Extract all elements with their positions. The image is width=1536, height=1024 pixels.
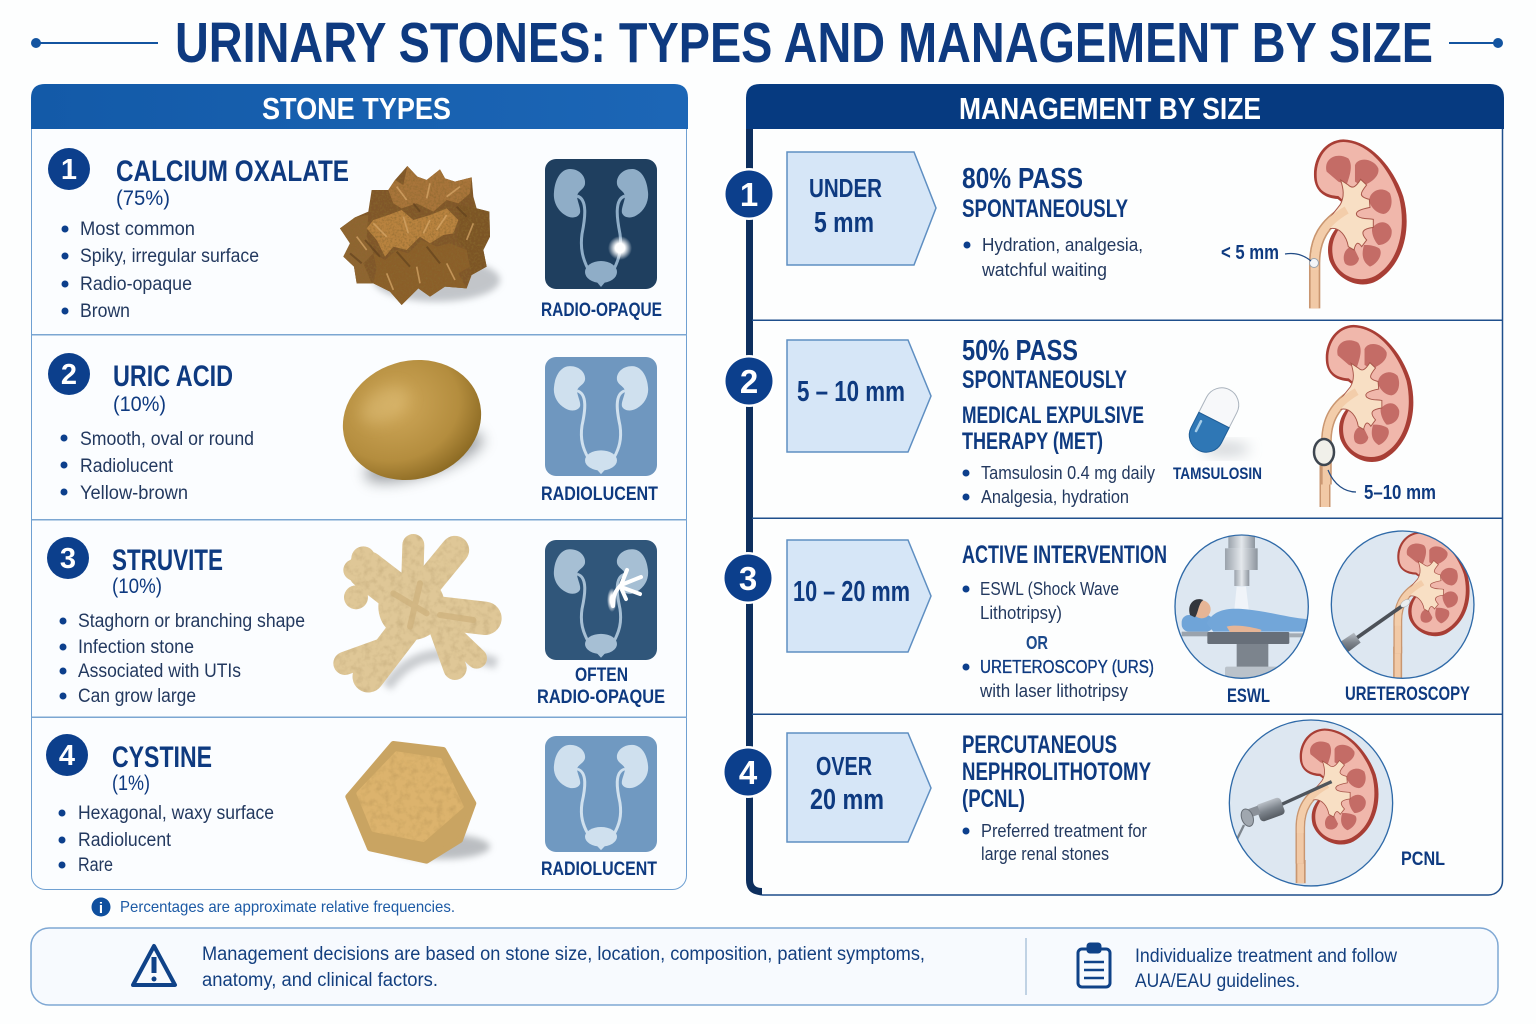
intervention list: ESWL (Shock Wave — [980, 579, 1119, 599]
calcium oxalate list: Brown — [80, 301, 130, 322]
calcium oxalate list: Spiky, irregular surface — [80, 246, 259, 267]
kidney: under 5 mm — [1221, 139, 1407, 308]
illustration: PCNL — [1229, 720, 1445, 886]
x-ray: radiolucent: RADIOLUCENT — [541, 484, 658, 505]
x-ray: radiolucent — [541, 357, 658, 505]
MET list: Tamsulosin 0.4 mg daily — [981, 463, 1155, 483]
guideline note: AUA/EAU guidelines. — [1135, 971, 1300, 992]
kidney: 5-10 mm — [1314, 325, 1436, 507]
row: 5-10 mm — [723, 325, 1436, 507]
size arrow: 5-10 mm — [787, 340, 931, 452]
management note: anatomy, and clinical factors. — [202, 970, 438, 991]
size arrow: 10-20 mm — [787, 540, 931, 652]
heading: 50% pass — [962, 335, 1127, 394]
calcium oxalate list — [62, 219, 259, 322]
struvite list — [60, 611, 305, 707]
icon: warning triangle — [133, 946, 175, 985]
size arrow: under 5 mm — [787, 152, 936, 265]
management header: MANAGEMENT BY SIZE — [959, 91, 1261, 126]
heading: MET: MEDICAL EXPULSIVE — [962, 402, 1144, 429]
calcium oxalate list: Radio-opaque — [80, 274, 192, 295]
badge 1 — [48, 148, 90, 190]
heading: 80% pass: 80% PASS — [962, 163, 1083, 195]
badge 4 — [722, 746, 774, 798]
calcium oxalate list: Most common — [80, 219, 195, 240]
cystine list: Rare — [78, 855, 113, 876]
heading: PCNL: (PCNL) — [962, 785, 1025, 813]
kidney: under 5 mm: < 5 mm — [1221, 242, 1279, 264]
icon: tamsulosin capsule — [1173, 382, 1262, 483]
size arrow: under 5 mm: 5 mm — [814, 207, 874, 239]
uric acid list: Radiolucent — [80, 456, 174, 477]
management note — [202, 944, 925, 991]
uric acid heading: URIC ACID — [113, 360, 233, 393]
size arrow: 10-20 mm: 10 – 20 mm — [793, 576, 910, 608]
heading: PCNL — [962, 731, 1151, 813]
illustration: PCNL: PCNL — [1401, 849, 1445, 870]
row: struvite — [47, 537, 665, 708]
intervention list: Lithotripsy) — [980, 603, 1062, 623]
size arrow: over 20 mm: 20 mm — [810, 784, 884, 816]
struvite list: Can grow large — [78, 686, 196, 707]
row: under 5 mm — [723, 139, 1407, 308]
badge 2: 2 — [61, 359, 77, 391]
badge 3: 3 — [60, 543, 76, 575]
illustration: ESWL: ESWL — [1227, 686, 1270, 707]
row: calcium oxalate — [48, 148, 662, 322]
management header — [746, 84, 1504, 129]
illustration: ureteroscopy: URETEROSCOPY — [1345, 684, 1470, 705]
cystine list: Radiolucent — [78, 830, 172, 851]
panel: stone types — [31, 84, 688, 890]
intervention list — [962, 579, 1154, 701]
illustration: ESWL — [1175, 533, 1313, 707]
stone: calcium oxalate — [340, 166, 500, 305]
size arrow: under 5 mm: UNDER — [809, 173, 882, 203]
struvite heading: (10%) — [112, 575, 162, 598]
x-ray: often radio-opaque — [537, 540, 665, 708]
PCNL list: large renal stones — [981, 844, 1109, 864]
advice list: Hydration, analgesia, — [982, 234, 1143, 255]
heading: MET — [962, 402, 1144, 455]
x-ray: radio-opaque — [541, 159, 662, 321]
uric acid list: Yellow-brown — [80, 483, 188, 504]
size arrow: over 20 mm: OVER — [816, 751, 872, 781]
struvite heading: STRUVITE — [112, 544, 223, 577]
row: over 20 mm — [722, 720, 1445, 886]
cystine list — [58, 803, 274, 876]
illustration: ureteroscopy — [1331, 531, 1474, 705]
heading: 80% pass: SPONTANEOUSLY — [962, 195, 1128, 223]
intervention list: URETEROSCOPY (URS) — [980, 657, 1154, 677]
icon: clipboard — [1078, 944, 1110, 987]
row: cystine — [46, 734, 657, 880]
stone: struvite — [343, 545, 497, 687]
kidney: 5-10 mm: 5–10 mm — [1364, 482, 1436, 504]
heading: PCNL: PERCUTANEOUS — [962, 731, 1117, 759]
badge 4: 4 — [739, 754, 758, 791]
footnote: Percentages are approximate relative frequencies. — [120, 899, 455, 916]
struvite list: Associated with UTIs — [78, 661, 241, 682]
badge 2: 2 — [740, 363, 758, 400]
footnote: i — [99, 900, 103, 917]
panel: management by size — [722, 84, 1504, 895]
size arrow: over 20 mm — [787, 733, 931, 842]
calcium oxalate heading — [116, 155, 349, 210]
cystine heading: CYSTINE — [112, 741, 212, 774]
intervention list: with laser lithotripsy — [979, 681, 1128, 701]
uric acid heading: (10%) — [113, 393, 166, 416]
calcium oxalate heading: CALCIUM OXALATE — [116, 155, 349, 188]
stone: cystine — [348, 744, 490, 861]
badge 3 — [722, 552, 774, 604]
guideline note — [1135, 946, 1397, 992]
heading: 80% pass — [962, 163, 1128, 223]
badge 1: 1 — [740, 176, 758, 213]
uric acid list — [60, 429, 254, 504]
badge 3 — [47, 537, 89, 579]
row: uric acid — [48, 343, 658, 505]
guideline note: Individualize treatment and follow — [1135, 946, 1397, 967]
heading: 50% pass: 50% PASS — [962, 335, 1078, 367]
heading: active intervention: ACTIVE INTERVENTION — [962, 541, 1167, 569]
x-ray: radiolucent — [541, 736, 657, 880]
x-ray: often radio-opaque: OFTEN — [575, 665, 628, 686]
advice list: watchful waiting — [981, 259, 1107, 280]
struvite heading — [112, 544, 223, 598]
MET list: Analgesia, hydration — [981, 487, 1129, 507]
intervention list: OR — [1026, 633, 1048, 653]
badge 2 — [723, 355, 775, 407]
stone types header: STONE TYPES — [262, 91, 451, 126]
cystine heading — [112, 741, 212, 795]
calcium oxalate heading: (75%) — [116, 187, 170, 210]
advice list — [964, 234, 1143, 280]
badge 1: 1 — [61, 154, 77, 186]
footer callout — [31, 928, 1498, 1005]
MET list — [962, 463, 1155, 507]
row: 10-20 mm — [722, 531, 1474, 707]
icon: tamsulosin capsule: TAMSULOSIN — [1173, 464, 1262, 483]
stone: uric acid — [328, 343, 496, 497]
badge 4: 4 — [59, 740, 75, 772]
uric acid list: Smooth, oval or round — [80, 429, 254, 450]
x-ray: radiolucent: RADIOLUCENT — [541, 859, 657, 880]
uric acid heading — [113, 360, 233, 416]
size arrow: 5-10 mm: 5 – 10 mm — [797, 376, 905, 408]
PCNL list — [962, 821, 1147, 864]
stone types header — [31, 84, 688, 129]
x-ray: radio-opaque: RADIO-OPAQUE — [541, 300, 662, 321]
badge 4 — [46, 734, 88, 776]
struvite list: Infection stone — [78, 637, 194, 658]
cystine heading: (1%) — [112, 772, 150, 795]
badge 2 — [48, 353, 90, 395]
heading: PCNL: NEPHROLITHOTOMY — [962, 758, 1151, 786]
heading: MET: THERAPY (MET) — [962, 428, 1103, 455]
badge 3: 3 — [739, 560, 757, 597]
cystine list: Hexagonal, waxy surface — [78, 803, 274, 824]
management note: Management decisions are based on stone size, location, composition, patient symptoms, — [202, 944, 925, 965]
x-ray: often radio-opaque: RADIO-OPAQUE — [537, 687, 665, 708]
struvite list: Staghorn or branching shape — [78, 611, 305, 632]
heading: 50% pass: SPONTANEOUSLY — [962, 366, 1127, 394]
PCNL list: Preferred treatment for — [981, 821, 1147, 841]
badge 1 — [723, 168, 775, 220]
